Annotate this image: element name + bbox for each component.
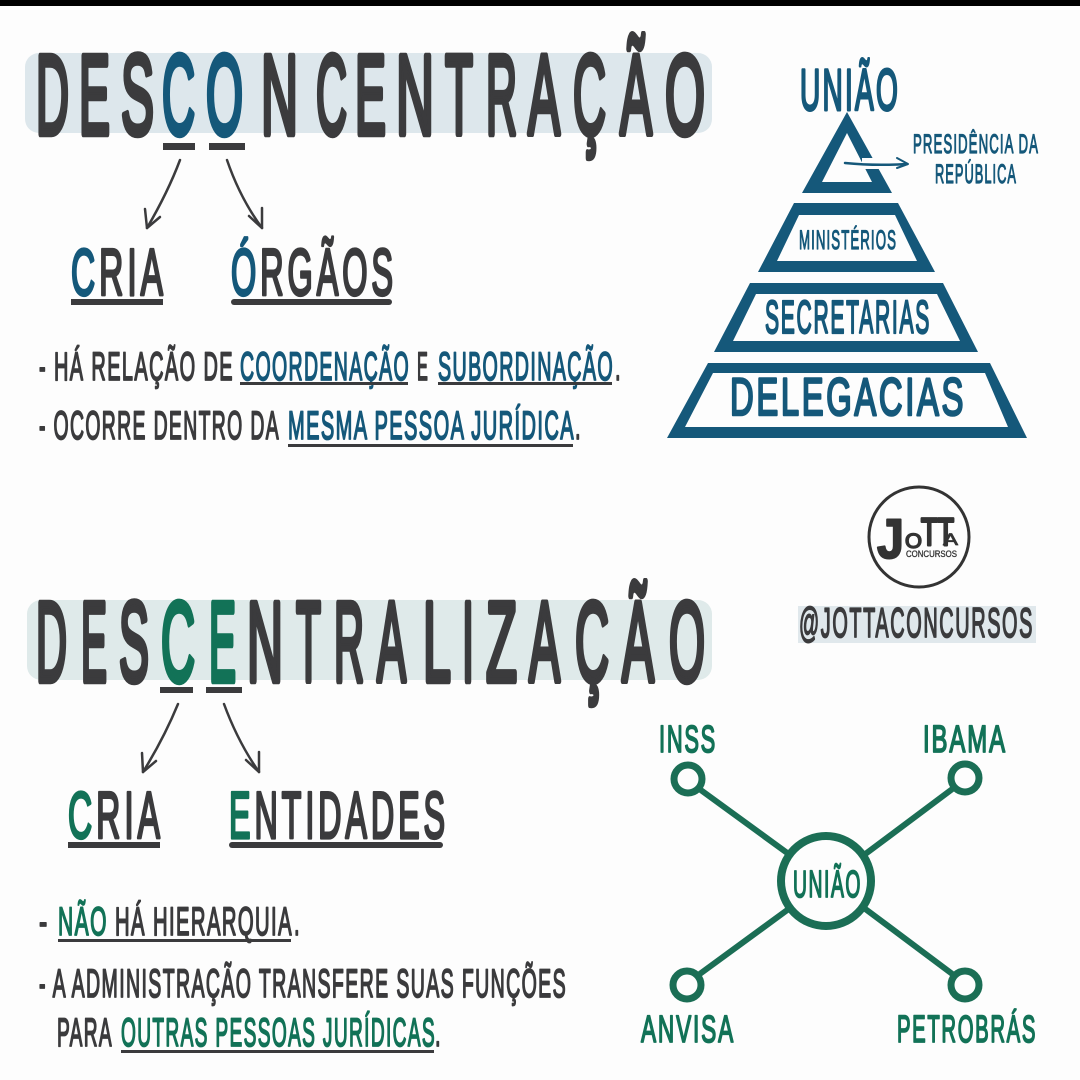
title: desconcentração: O <box>206 32 243 158</box>
title: descentralização: I <box>462 579 474 705</box>
word: entidades <box>229 778 449 852</box>
title: descentralização: E <box>81 579 107 705</box>
title: descentralização: L <box>423 579 451 705</box>
text: coordenação e subordinação: SUBORDINAÇÃO <box>438 344 614 389</box>
logo: jotta concursos: A <box>943 530 959 549</box>
node: inss: INSS <box>659 719 717 761</box>
title: desconcentração: A <box>528 32 560 158</box>
arrow: to órgãos <box>227 160 262 228</box>
logo: jotta concursos: CONCURSOS <box>906 549 957 559</box>
logo: jotta concursos <box>869 487 969 587</box>
title: descentralização: C <box>161 579 195 705</box>
node: união <box>781 836 871 926</box>
title: desconcentração: T <box>445 32 473 158</box>
word: cria: CRIA <box>71 235 167 309</box>
logo: jotta concursos: O <box>905 530 922 553</box>
title: desconcentração: C <box>316 32 347 158</box>
text: transfere suas funções: OUTRAS PESSOAS JURÍDICAS <box>121 1010 436 1055</box>
pyramid level: ministérios <box>758 203 935 272</box>
title: desconcentração: R <box>486 32 517 158</box>
word: órgãos: ÓRGÃOS <box>231 235 397 309</box>
node: inss <box>659 719 717 793</box>
node: união: UNIÃO <box>793 863 862 906</box>
title: descentralização: A <box>529 579 560 705</box>
title: desconcentração <box>25 32 712 158</box>
title: desconcentração: Ã <box>620 32 652 158</box>
title: desconcentração: E <box>79 32 110 158</box>
title: desconcentração: N <box>261 32 298 158</box>
text: transfere suas funções <box>39 961 567 1055</box>
arrow: presidência da república <box>845 158 908 169</box>
text: coordenação e subordinação: . <box>615 345 622 389</box>
title: desconcentração: O <box>665 32 705 158</box>
word: órgãos <box>231 235 397 309</box>
title: descentralização: Z <box>486 579 517 705</box>
text: transfere suas funções: PARA <box>57 1011 113 1055</box>
text: não há hierarquia: NÃO <box>58 899 108 944</box>
node: ibama <box>923 719 1007 792</box>
pyramid level: secretarias <box>714 283 978 352</box>
chart: pyramid of união <box>667 58 1039 438</box>
title: descentralização: T <box>296 579 321 705</box>
title: descentralização: N <box>247 579 283 705</box>
title: desconcentração: N <box>396 32 434 158</box>
text: não há hierarquia: . <box>294 900 301 944</box>
text: mesma pessoa jurídica: - OCORRE DENTRO DA <box>39 404 280 448</box>
arrow: to entidades <box>224 704 259 772</box>
pyramid level: delegacias <box>667 363 1027 438</box>
text: O <box>669 579 705 705</box>
text: mesma pessoa jurídica: MESMA PESSOA JURÍDICA <box>288 403 575 448</box>
text: coordenação e subordinação <box>39 344 622 389</box>
title: descentralização: Ç <box>575 579 609 705</box>
text: mesma pessoa jurídica: . <box>575 404 582 448</box>
node: petrobrás <box>897 971 1037 1051</box>
logo: jotta concursos: TT <box>921 512 954 554</box>
pyramid level: ministérios: MINISTÉRIOS <box>799 225 897 255</box>
title: descentralização: A <box>377 579 406 705</box>
word: cria <box>68 778 164 852</box>
arrow: to cria <box>145 160 180 228</box>
word: cria: CRIA <box>68 778 164 852</box>
word: entidades: ENTIDADES <box>229 778 449 852</box>
label: presidência da república <box>913 128 1039 189</box>
chart: network of união <box>641 719 1037 1051</box>
text: não há hierarquia <box>39 899 301 944</box>
title: descentralização: D <box>36 579 67 705</box>
node: ibama: IBAMA <box>923 719 1007 761</box>
text: coordenação e subordinação: E <box>417 345 429 389</box>
title: desconcentração: D <box>36 32 69 158</box>
chart: pyramid of união: UNIÃO <box>800 58 900 123</box>
title: desconcentração: E <box>355 32 386 158</box>
title: descentralização: Ã <box>622 579 654 705</box>
title: desconcentração: Ç <box>573 32 606 158</box>
connector lines <box>697 787 955 976</box>
title: descentralização: E <box>209 579 236 705</box>
title: descentralização: S <box>119 579 149 705</box>
node: anvisa <box>641 971 735 1051</box>
title: desconcentração: C <box>162 32 195 158</box>
arrow: to cria <box>142 704 178 772</box>
logo: jotta concursos: J <box>877 507 904 570</box>
text: coordenação e subordinação: - HÁ RELAÇÃO DE <box>39 344 234 389</box>
pyramid level: presidência <box>802 112 892 193</box>
panel: descentralização <box>27 579 712 1055</box>
title: desconcentração: S <box>121 32 154 158</box>
text: não há hierarquia: HÁ HIERARQUIA <box>115 899 293 944</box>
panel: desconcentração <box>25 32 712 448</box>
text: coordenação e subordinação: COORDENAÇÃO <box>240 344 410 389</box>
node: anvisa: ANVISA <box>641 1009 735 1051</box>
title: descentralização <box>27 579 712 705</box>
text: transfere suas funções: . <box>435 1011 442 1055</box>
word: cria <box>71 235 167 309</box>
title: descentralização: R <box>334 579 364 705</box>
text: não há hierarquia: - <box>39 900 49 944</box>
